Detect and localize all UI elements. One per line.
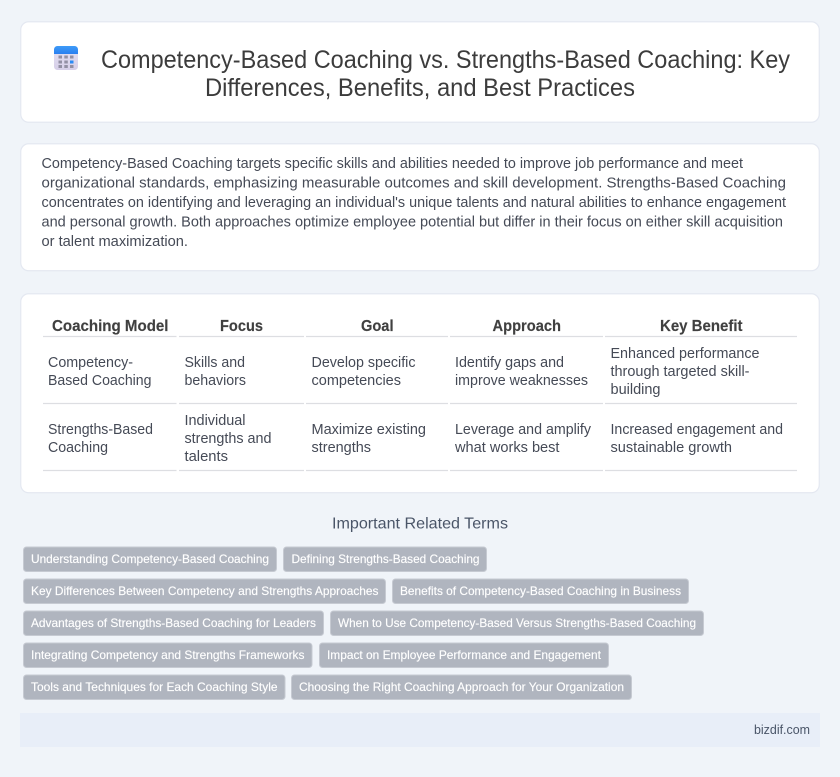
tag: Key Differences Between Competency and Strengths Approaches bbox=[31, 584, 378, 598]
table row: strengths-based coaching: Increased engagement and bbox=[610, 422, 783, 438]
table row: strengths-based coaching: strengths bbox=[312, 440, 371, 456]
table row: competency-based coaching: Skills and bbox=[184, 355, 245, 371]
table row: strengths-based coaching: Individual bbox=[184, 413, 246, 429]
tag bbox=[24, 675, 285, 700]
table row: competency-based coaching: improve weaknesses bbox=[455, 373, 588, 389]
footer bbox=[20, 713, 820, 747]
table header row: Key Benefit bbox=[660, 318, 743, 335]
table row: competency-based coaching bbox=[43, 346, 797, 404]
table row: strengths-based coaching: Strengths-Based bbox=[48, 422, 153, 438]
table header row: Goal bbox=[361, 318, 394, 335]
tag bbox=[24, 611, 324, 636]
tag bbox=[24, 547, 276, 572]
table row: strengths-based coaching bbox=[43, 413, 797, 470]
table row: competency-based coaching: competencies bbox=[312, 373, 401, 389]
table row: strengths-based coaching: Leverage and amplify bbox=[455, 422, 592, 438]
table header row: Focus bbox=[220, 318, 263, 335]
tag bbox=[392, 579, 688, 604]
table row: strengths-based coaching: Maximize existing bbox=[312, 422, 426, 438]
heading: title text: Differences, Benefits, and Best Practices bbox=[205, 74, 635, 102]
table row: competency-based coaching: Enhanced performance bbox=[610, 346, 760, 362]
tag bbox=[284, 547, 486, 572]
text block: summary: Competency-Based Coaching targets specific skills and abilities needed to improve job performance and meet bbox=[42, 156, 743, 172]
tag bbox=[320, 643, 608, 668]
icon: calendar bbox=[54, 46, 78, 70]
heading: title text bbox=[101, 46, 790, 102]
footer text: source: bizdif.com bbox=[754, 723, 810, 737]
table header row: Approach bbox=[492, 318, 561, 335]
text block: summary: and personal growth. Both approaches optimize employee potential but differ in their focus on either skill acquisition bbox=[42, 214, 783, 230]
table row: competency-based coaching: Develop specific bbox=[312, 355, 416, 371]
table header row: Coaching Model bbox=[52, 318, 168, 335]
text block: summary: organizational standards, emphasizing measurable outcomes and skill development. Strengths-Based Coaching bbox=[42, 176, 786, 192]
tag bbox=[24, 579, 386, 604]
heading: important related terms: Important Related Terms bbox=[332, 516, 508, 532]
panel: comparison table bbox=[21, 294, 819, 493]
panel: title bbox=[21, 22, 819, 122]
table header row bbox=[43, 318, 797, 336]
table row: strengths-based coaching: talents bbox=[184, 449, 228, 465]
table row: competency-based coaching: behaviors bbox=[184, 373, 246, 389]
panel: summary paragraph bbox=[21, 144, 819, 271]
tag bbox=[24, 643, 312, 668]
tag: Impact on Employee Performance and Engagement bbox=[327, 648, 602, 662]
table row: competency-based coaching: Identify gaps and bbox=[455, 355, 564, 371]
heading: title text: Competency-Based Coaching vs. Strengths-Based Coaching: Key bbox=[101, 46, 790, 74]
table row: strengths-based coaching: strengths and bbox=[184, 431, 272, 447]
tag: Advantages of Strengths-Based Coaching for Leaders bbox=[31, 616, 316, 630]
tag: Defining Strengths-Based Coaching bbox=[292, 552, 480, 566]
table row: strengths-based coaching: what works best bbox=[454, 440, 560, 456]
text block: summary: concentrates on identifying and leveraging an individual's unique talents and natural abilities to enhance engagement bbox=[42, 195, 786, 211]
tag: Choosing the Right Coaching Approach for Your Organization bbox=[299, 680, 624, 694]
text block: summary: or talent maximization. bbox=[42, 234, 188, 250]
tag bbox=[292, 675, 632, 700]
table row: strengths-based coaching: Coaching bbox=[48, 440, 108, 456]
table row: competency-based coaching: Competency- bbox=[48, 355, 133, 371]
related terms tags bbox=[24, 547, 704, 700]
tag: When to Use Competency-Based Versus Strengths-Based Coaching bbox=[338, 616, 696, 630]
table row: competency-based coaching: through targeted skill- bbox=[610, 364, 750, 380]
tag: Integrating Competency and Strengths Frameworks bbox=[31, 648, 304, 662]
table row: competency-based coaching: Based Coaching bbox=[48, 373, 152, 389]
tag: Tools and Techniques for Each Coaching Style bbox=[31, 680, 278, 694]
tag bbox=[330, 611, 704, 636]
text block: summary bbox=[42, 156, 786, 250]
tag: Benefits of Competency-Based Coaching in Business bbox=[400, 584, 681, 598]
table row: strengths-based coaching: sustainable growth bbox=[610, 440, 732, 456]
table row: competency-based coaching: building bbox=[610, 382, 660, 398]
tag: Understanding Competency-Based Coaching bbox=[31, 552, 269, 566]
